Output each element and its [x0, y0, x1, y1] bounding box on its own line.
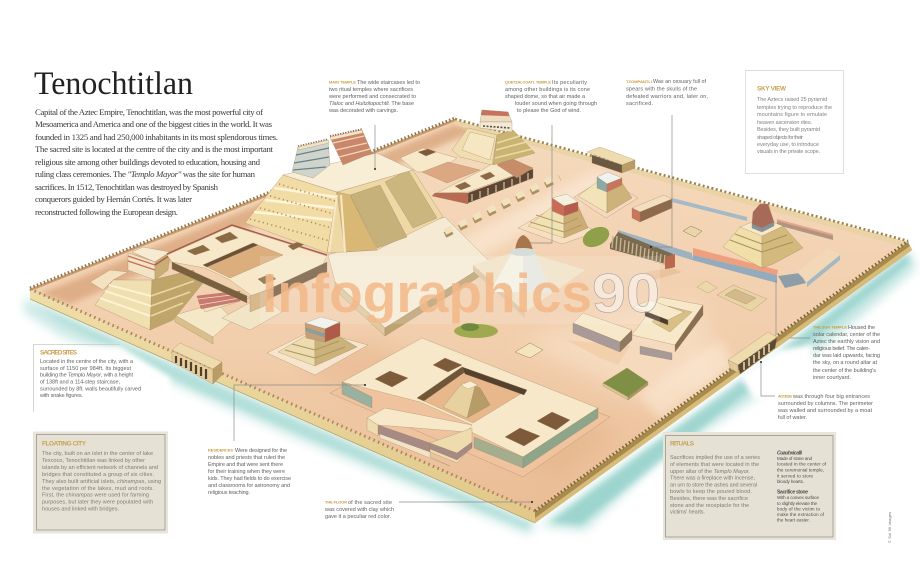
sidebar: cuauhxicalli: the ceremonial temple,: [777, 468, 824, 472]
back gate: [587, 147, 635, 173]
stair face: [327, 170, 443, 253]
floating city text: islands by an efficient network of channels and: [42, 465, 158, 471]
caption: residences: Were designed for the: [235, 448, 287, 454]
caption: residences: and classrooms for astronomy and: [208, 483, 290, 489]
intro text: religious site among other buildings devoted to education, housing and: [35, 157, 261, 167]
caption: residences: religious teaching.: [208, 490, 250, 496]
caption: Tzompantli: defeated warriors and, later on,: [626, 94, 708, 100]
caption: Tzompantli: Was an ossuary full of: [653, 79, 706, 85]
caption: main temple: was decorated with carvings.: [328, 108, 398, 114]
caption: residences: kids. They had fields to do exercise: [208, 476, 291, 482]
intro text: founded in 1325 and had 250,000 inhabitants in its most splendorous times.: [35, 132, 278, 142]
caption: main temple: The wide staircases led to: [357, 80, 420, 86]
sky view text: Besides, they built pyramid: [757, 127, 820, 133]
sidebar: sacrifice stone: [777, 490, 825, 522]
caption: sun temple: Housed the: [848, 325, 875, 331]
caption: access: was walled and surrounded by a moat: [777, 408, 872, 414]
caption: sun temple: solar calendar, center of the: [813, 332, 880, 338]
caption: sun temple: [813, 324, 880, 381]
lower right complex: [566, 297, 703, 365]
caption: Quetzalcoatl temple: QUETZALCOATL TEMPLE: [505, 80, 551, 84]
caption: Tzompantli: TZOMPANTLI: [626, 79, 652, 84]
floating city text: the vegetation of the lakes, mud and roots.: [42, 486, 154, 492]
intro text: sacrifices. In 1512, Tenochtitlan was destroyed by Spanish: [35, 182, 219, 192]
sky view text: shaped objects for their: [757, 135, 803, 141]
panel: rituals: [663, 432, 836, 540]
intro text: ruling class ceremonies. The "Templo Mayor" was the site for human: [35, 169, 256, 179]
sacred sites text: surrounded by 8ft. walls beautifully carved: [40, 386, 141, 392]
central back pyramid: [452, 110, 535, 165]
sidebar: cuauhxicalli: it served to store: [777, 474, 813, 478]
watermark: Infographics: [262, 262, 592, 324]
caption: residences: for their training when they were: [208, 469, 285, 475]
caption: main temple: [328, 80, 420, 114]
sky view text: visuals in the private scope.: [757, 149, 820, 155]
right gate: [728, 332, 777, 374]
sacred sites text: building the Templo Mayor, with a height: [40, 372, 133, 378]
heading: rituals: RITUALS: [670, 440, 695, 448]
caption: sun temple: inner courtyard.: [813, 375, 851, 381]
moat water: [24, 250, 916, 535]
green square garden: [603, 368, 648, 400]
watermark: 90: [592, 262, 660, 324]
sidebar: cuauhxicalli: Made of stone and: [777, 456, 812, 461]
back courtyard building: [400, 148, 533, 204]
back-left wall: [30, 118, 455, 290]
rituals text: Sacrifices implied the use of a series: [670, 455, 760, 461]
floating city text: bridges that constituted a group of six cities.: [42, 472, 154, 478]
caption: sun temple: religious belief. The calen-: [813, 346, 870, 352]
sacred sites text: [39, 359, 141, 399]
caption: sun temple: dar was laid upwards, facing: [813, 353, 880, 359]
left gate: [172, 343, 222, 384]
caption: the floor: THE FLOOR: [325, 500, 347, 504]
small shrines: [697, 281, 767, 311]
floating city text: Texcoco, Tenochtitlan was linked by other: [42, 458, 145, 464]
caption: main temple: two ritual temples where sacrifices: [329, 87, 413, 93]
sky view text: heaven ascension rites.: [757, 120, 812, 126]
floating city text: [42, 451, 161, 512]
caption: Quetzalcoatl temple: Its peculiarity: [552, 80, 587, 86]
rituals text: stone and the receptacle for the: [670, 503, 749, 509]
palace: [330, 338, 610, 477]
sky view text: temples trying to reproduce the: [757, 105, 832, 111]
rituals text: upper altar of the Templo Mayor.: [670, 469, 750, 475]
panel: sky view: [746, 70, 844, 174]
caption: main temple: were performed and consecrated to: [328, 94, 416, 100]
small central altar: [683, 226, 702, 237]
caption: access: was through four big entrances: [792, 394, 870, 400]
heading: sacred sites: SACRED SITES: [40, 350, 78, 356]
row of small blocks: [445, 175, 560, 235]
caption: Tzompantli: sacrificed.: [626, 101, 653, 107]
small altar: [515, 343, 543, 358]
floating city text: They also built artificial islets, chinampas, using: [42, 479, 161, 485]
sky view text: [757, 97, 832, 155]
round temple: [473, 235, 585, 318]
floating city text: purposes, but later they were populated with: [42, 500, 153, 506]
left small pyramid: [267, 317, 368, 375]
rituals text: [670, 455, 760, 516]
rituals text: Besides, there was the sacrifice: [670, 496, 748, 502]
rituals text: There was a fireplace with incense,: [670, 476, 755, 482]
skull rack: [610, 232, 682, 280]
intro text: The sacred site is located at the centre of the city and is the most important: [35, 144, 274, 154]
sidebar: cuauhxicalli: bloody hearts.: [777, 479, 804, 484]
sidebar: cuauhxicalli: [777, 450, 827, 484]
back-right wall: [455, 119, 908, 247]
leader: residences: [234, 384, 366, 441]
twin shrines: [330, 130, 372, 165]
right pyramid: [723, 204, 803, 268]
sidebar: sacrifice stone: body of the victim to: [777, 506, 820, 512]
caption: access: surrounded by columns. The perimeter: [778, 401, 873, 407]
caption: Tzompantli: [626, 79, 708, 107]
dotted side face: [245, 175, 337, 253]
caption: residences: [208, 448, 291, 496]
leader: the floor: [399, 501, 533, 503]
sky view text: The Aztecs raised 25 pyramid: [757, 97, 827, 103]
caption: Quetzalcoatl temple: louder sound when going through: [515, 101, 597, 107]
garden upper: [580, 223, 612, 251]
rituals text: of elements that were located in the: [670, 462, 759, 468]
sidebar: sacrifice stone: With a convex surface: [777, 495, 819, 500]
sacred sites text: Located in the centre of the city, with a: [40, 359, 134, 365]
floating city text: houses and linked with bridges.: [42, 506, 119, 512]
caption: residences: Empire and that were sent there: [208, 462, 283, 468]
caption: the floor: was covered with clay which: [324, 507, 394, 513]
garden: [454, 323, 498, 338]
caption: sun temple: THE SUN TEMPLE: [813, 324, 847, 330]
sacred sites text: surface of 1150 per 984ft. Its biggest: [40, 366, 131, 372]
Templo Mayor pyramid: [245, 129, 490, 336]
sacred sites text: of 138ft and a 114-step staircase,: [40, 380, 120, 386]
front-left wall: [30, 289, 535, 523]
long building with enclosure: [632, 195, 672, 222]
panel: sacred sites: [34, 344, 141, 412]
title: Tenochtitlan: [34, 66, 193, 102]
sidebar: sacrifice stone: the heart easier.: [777, 518, 810, 522]
illustration: sacred site aerial view: [24, 110, 916, 535]
caption: access: ACCESS: [778, 394, 792, 398]
floating city text: The city, built on an islet in the center of lake: [42, 451, 153, 457]
caption: residences: nobles and priests that ruled the: [208, 455, 285, 461]
rituals text: bowls to keep the poured blood.: [670, 489, 752, 495]
caption: main temple: MAIN TEMPLE: [329, 80, 356, 84]
rituals text: an urn to store the ashes and several: [670, 482, 757, 488]
leader: Quetzalcoatl temple: [530, 125, 552, 243]
caption: Quetzalcoatl temple: shaped dome, so that air made a: [505, 94, 586, 100]
leader: main temple: [374, 125, 376, 170]
caption: the floor: of the sacred site: [348, 500, 392, 506]
caption: the floor: gave it a peculiar red color.: [325, 514, 391, 520]
intro text: [35, 107, 278, 217]
panel: floating city: [33, 432, 168, 534]
rituals text: victims' hearts.: [670, 510, 705, 516]
leader: access: [760, 361, 775, 396]
copyright: © Sol 90 Images: [888, 512, 892, 543]
sky view text: mountains figure to emulate: [757, 112, 827, 118]
red-top pyramid: [518, 194, 597, 244]
caption: Quetzalcoatl temple: [505, 80, 597, 114]
sidebar: sacrifice stone: Sacrifice stone: [777, 490, 808, 496]
sidebar: sacrifice stone: make the extraction of: [777, 512, 825, 517]
sidebar: cuauhxicalli: located in the center of: [777, 462, 827, 466]
caption: the floor: [324, 500, 394, 520]
intro text: reconstructed following the European design.: [35, 207, 178, 217]
summit platform: [283, 153, 413, 192]
green-top pyramid: [574, 172, 638, 218]
caption: sun temple: the sky, on a round altar at: [813, 360, 877, 366]
floor shading: [40, 124, 735, 480]
caption: Quetzalcoatl temple: to please the God of wind.: [517, 108, 581, 114]
sidebar: sacrifice stone: to slightly elevate the: [777, 501, 817, 506]
caption: Tzompantli: spears with the skulls of the: [626, 86, 697, 92]
terrace below the pyramid: [328, 217, 490, 328]
sacred sites text: with snake figures.: [39, 393, 83, 399]
caption: sun temple: the center of the building's: [813, 368, 876, 374]
caption: main temple: Tlaloc and Huitzilopochtli. The base: [329, 101, 414, 107]
intro text: Capital of the Aztec Empire, Tenochtitlan, was the most powerful city of: [35, 107, 263, 117]
floating city text: First, the chinampas were used for farming: [42, 492, 149, 498]
courtyard complex: [167, 225, 327, 330]
leader: Tzompantli: [650, 115, 672, 248]
sky view text: everyday use, to introduce: [757, 142, 819, 148]
caption: access: full of water.: [778, 415, 807, 421]
heading: floating city: FLOATING CITY: [42, 440, 87, 448]
caption: sun temple: Aztec the earthly vision and: [813, 339, 880, 345]
left pyramid: [90, 247, 233, 344]
caption: residences: RESIDENCES: [208, 448, 233, 452]
intro text: conquerors guided by Hernán Cortés. It was later: [35, 194, 192, 204]
caption: Quetzalcoatl temple: among other buildings is its cone: [505, 87, 590, 93]
platform floor: [30, 120, 908, 512]
intro text: Mesoamerica and America and one of the biggest cities in the world. It was: [35, 119, 273, 129]
sidebar: cuauhxicalli: Cuauhxicalli: [777, 450, 803, 456]
leader: sun temple: [776, 280, 810, 338]
enclosure walls: [618, 198, 840, 288]
heading: sky view: SKY VIEW: [757, 86, 787, 92]
front-right wall: [535, 241, 912, 523]
caption: access: [777, 394, 873, 421]
